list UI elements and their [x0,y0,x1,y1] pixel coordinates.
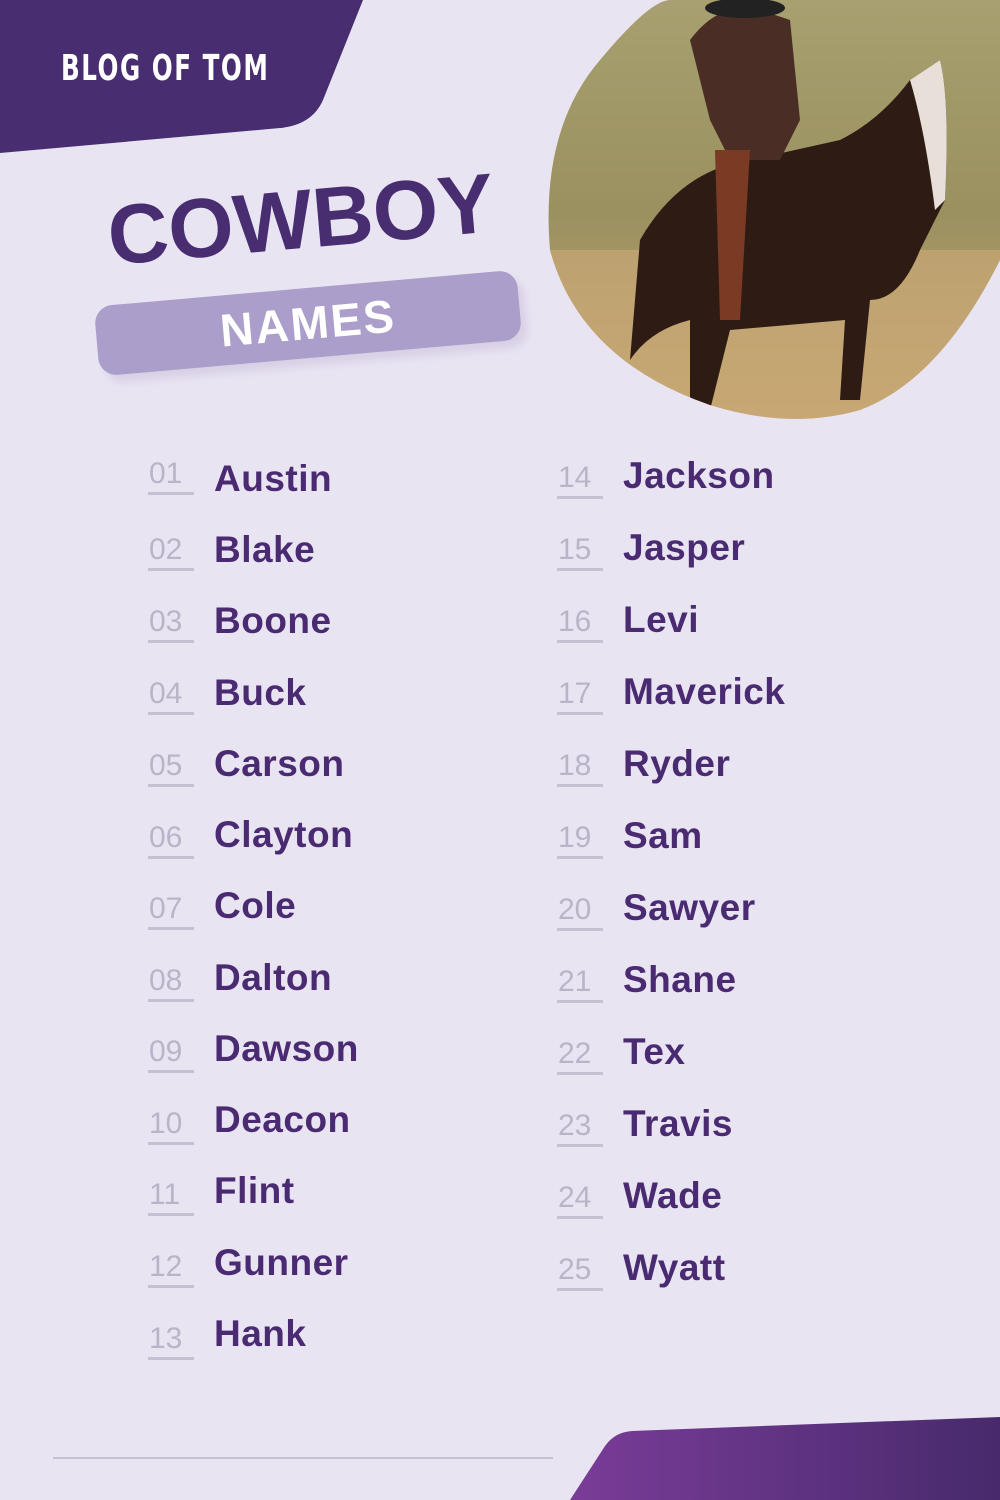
list: names 14-25: Levi [623,599,699,640]
list: names 14-25: Wyatt [623,1247,726,1288]
list: names 14-25: Shane [623,959,737,1000]
list: names 14-25: 17 [558,677,591,710]
list: names 14-25: Ryder [623,743,730,784]
list: names 14-25: 16 [558,605,591,638]
list: names 14-25: 14 [558,461,591,494]
list: names 01-13: Clayton [214,814,353,855]
subtitle band: names [94,270,522,376]
list: names 14-25: 24 [558,1181,591,1214]
list: names 01-13: Austin [214,458,332,499]
list: names 14-25: Tex [623,1031,686,1072]
list: names 14-25: 25 [558,1253,591,1286]
list: names 01-13: Dalton [214,957,332,998]
list: names 14-25: 21 [558,965,591,998]
list: names 01-13: 13 [149,1322,182,1355]
list: names 14-25: 22 [558,1037,591,1070]
list: names 14-25: 23 [558,1109,591,1142]
list: names 01-13: Gunner [214,1242,349,1283]
list: names 01-13: Buck [214,672,306,713]
list: names 14-25: Maverick [623,671,785,712]
list: names 01-13: 04 [149,677,182,710]
list: names 01-13: Boone [214,600,332,641]
list: names 14-25: Jackson [623,455,775,496]
list: names 01-13: 08 [149,964,182,997]
list: names 01-13: Blake [214,529,315,570]
subtitle band: names: NAMES [218,289,398,357]
list: names 14-25: 18 [558,749,591,782]
list: names 01-13: Hank [214,1313,306,1354]
list: names 01-13: Carson [214,743,344,784]
list: names 01-13: Cole [214,885,296,926]
list: names 14-25 [557,455,785,1291]
brand text: BLOG OF TOM [61,48,269,89]
list: names 14-25: Jasper [623,527,745,568]
list: names 14-25: Sam [623,815,703,856]
title: cowboy: COWBOY [104,155,498,283]
list: names 14-25: Sawyer [623,887,756,928]
list: names 01-13: 11 [149,1178,180,1211]
list: names 01-13: 07 [149,892,182,925]
list: names 14-25: 15 [558,533,591,566]
list: names 14-25: 19 [558,821,591,854]
list: names 01-13: 09 [149,1035,182,1068]
list: names 01-13: Flint [214,1170,295,1211]
list: names 01-13: 12 [149,1250,182,1283]
header banner: blog of tom [0,0,363,153]
list: names 01-13: 05 [149,749,182,782]
list: names 01-13: Deacon [214,1099,351,1140]
list: names 01-13: 01 [149,457,182,490]
list: names 14-25: Travis [623,1103,733,1144]
list: names 01-13: 03 [149,605,182,638]
list: names 01-13: 06 [149,821,182,854]
photo: cowboy on horse [548,0,1000,419]
footer purple shape [570,1417,1000,1500]
list: names 14-25: 20 [558,893,591,926]
list: names 01-13 [148,457,359,1360]
list: names 01-13: 02 [149,533,182,566]
list: names 01-13: 10 [149,1107,182,1140]
list: names 14-25: Wade [623,1175,722,1216]
list: names 01-13: Dawson [214,1028,359,1069]
